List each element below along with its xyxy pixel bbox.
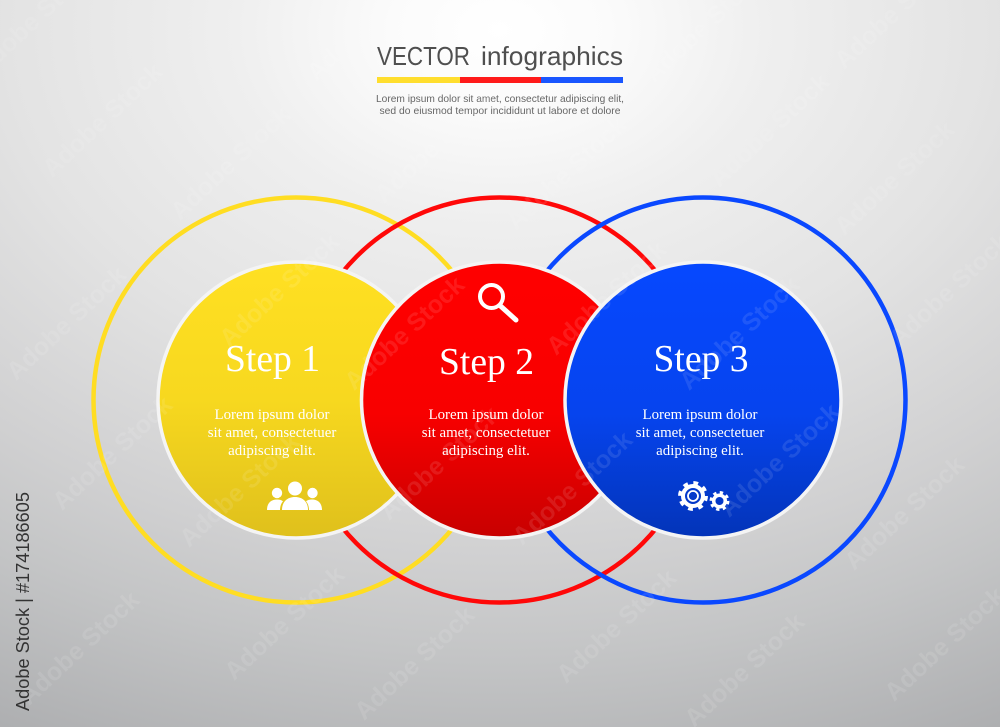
watermarks: Adobe Stock (674, 271, 805, 395)
watermarks: Adobe Stock (37, 58, 168, 182)
subtitle text: Lorem ipsum dolor sit amet, consectetur adipiscing elit, (376, 93, 624, 105)
watermarks: Adobe Stock (47, 391, 178, 515)
watermarks: Adobe Stock (369, 84, 500, 208)
watermarks: Adobe Stock (704, 68, 835, 192)
circle: step 3 (565, 262, 841, 538)
text: step 3 body: sit amet, consectetuer (636, 425, 764, 441)
circle: step 2 (362, 262, 638, 538)
watermarks: Adobe Stock (374, 401, 505, 525)
stock id label: Adobe Stock | #174186605 (12, 492, 33, 711)
title: VECTOR (377, 41, 470, 71)
watermarks: Adobe Stock (219, 561, 350, 685)
title (377, 41, 623, 71)
watermarks: Adobe Stock (1, 261, 132, 385)
text: step 3 body: Lorem ipsum dolor (643, 407, 758, 423)
text: step 2 body: sit amet, consectetuer (422, 425, 550, 441)
text: step 1 body: adipiscing elit. (228, 443, 316, 459)
heading: step 2: Step 2 (439, 342, 534, 383)
text: step 1 body: Lorem ipsum dolor (215, 407, 330, 423)
icon: people (267, 482, 322, 510)
watermarks: Adobe Stock (339, 271, 470, 395)
text: step 2 body: adipiscing elit. (442, 443, 530, 459)
watermarks: Adobe Stock (541, 236, 672, 360)
heading: step 1: Step 1 (225, 339, 320, 380)
watermarks: Adobe Stock (174, 428, 305, 552)
subtitle text: sed do eiusmod tempor incididunt ut labore et dolore (380, 105, 621, 117)
icon: magnifier (480, 285, 516, 320)
large outline rings (94, 198, 906, 602)
watermarks: Adobe Stock (14, 586, 145, 710)
heading: step 3: Step 3 (654, 339, 748, 380)
watermarks: Adobe Stock (165, 101, 296, 225)
icon: gears (680, 483, 728, 509)
subtitle text (376, 93, 624, 117)
text: step 1 body: sit amet, consectetuer (208, 425, 336, 441)
watermarks: Adobe Stock (501, 111, 632, 235)
text: step 2 body: Lorem ipsum dolor (429, 407, 544, 423)
text: step 3 body: adipiscing elit. (656, 443, 744, 459)
watermarks: Adobe Stock (214, 228, 345, 352)
watermarks: Adobe Stock (839, 451, 970, 575)
watermarks: Adobe Stock (829, 116, 960, 240)
tricolour title rule (377, 77, 623, 83)
title: infographics (481, 41, 623, 71)
watermarks: Adobe Stock (551, 564, 682, 688)
watermarks: Adobe Stock (507, 426, 638, 550)
watermarks: Adobe Stock (349, 601, 480, 725)
circle: step 1 (158, 262, 434, 538)
watermarks: Adobe Stock (714, 398, 845, 522)
